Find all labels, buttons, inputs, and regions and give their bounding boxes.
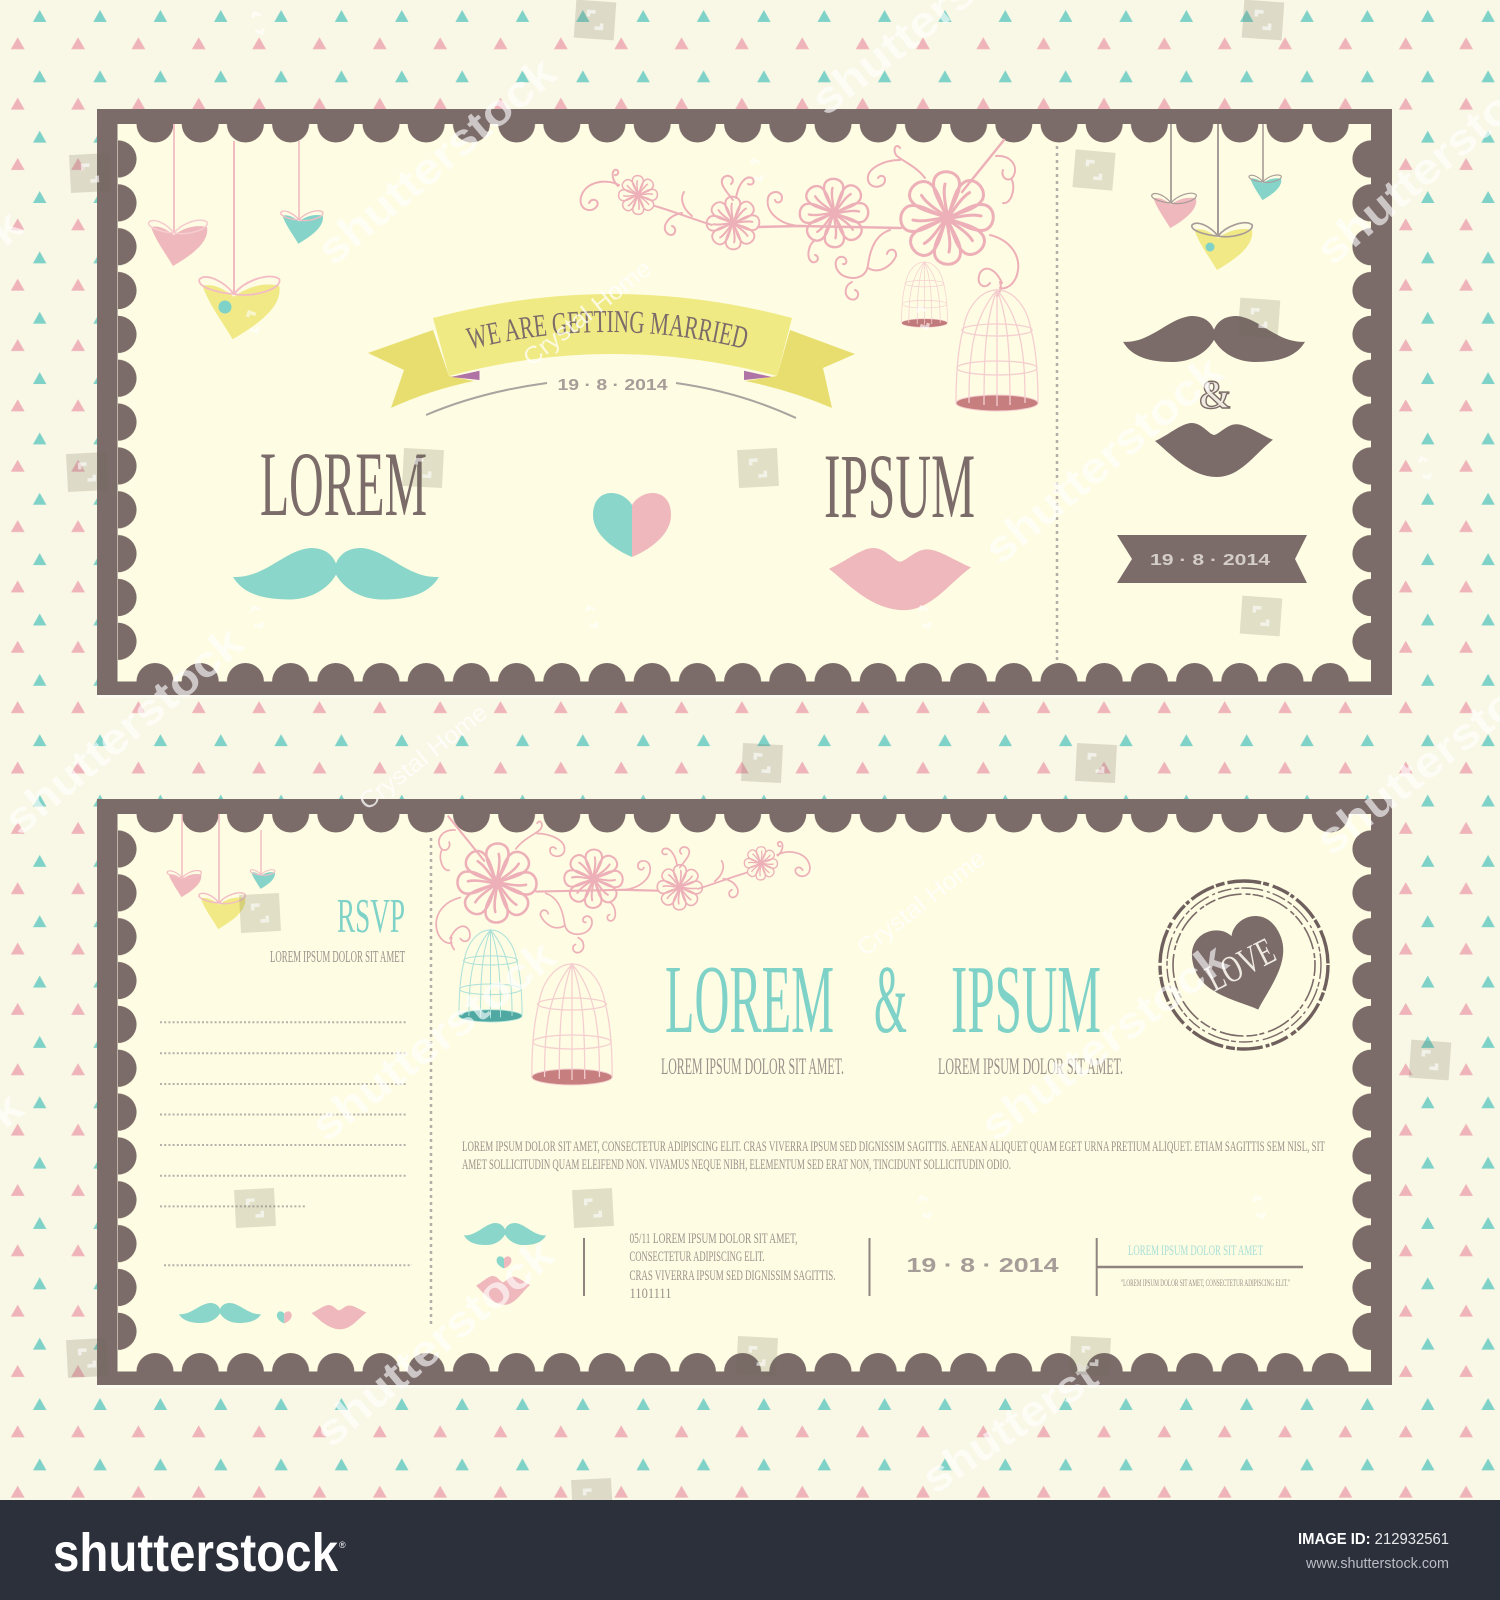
heading: LOREM: LOREM	[260, 433, 427, 535]
watermarks: shutterstock	[308, 47, 566, 275]
love stamp: LOVE	[1199, 930, 1282, 1000]
icon: small teal moustache	[464, 1223, 546, 1245]
watermarks: Crystal Home	[852, 845, 991, 962]
stub: date ribbon	[1117, 535, 1307, 583]
body paragraph	[462, 1139, 1325, 1173]
panel: front ticket	[97, 109, 1392, 698]
address block	[630, 1231, 836, 1302]
date with arcs	[426, 377, 796, 418]
shutterstock logo: shutterstock	[53, 1523, 339, 1583]
heading: LOREM & IPSUM: IPSUM	[951, 946, 1101, 1053]
stub: ampersand: &	[1198, 372, 1232, 417]
image id: IMAGE ID: 212932561	[1298, 1531, 1449, 1548]
stub: hanging pink heart	[1152, 124, 1196, 228]
watermarks: shutterstock	[972, 934, 1237, 1151]
stub: hanging teal heart	[1249, 124, 1281, 200]
teal caption: LOREM IPSUM DOLOR SIT AMET	[1128, 1243, 1263, 1259]
panel: back ticket	[97, 799, 1392, 1388]
stub: hanging yellow heart	[1192, 124, 1252, 270]
subtitles: LOREM IPSUM DOLOR SIT AMET.	[938, 1054, 1123, 1079]
address block: CONSECTETUR ADIPISCING ELIT.	[630, 1249, 764, 1265]
heading: LOREM & IPSUM: LOREM	[665, 946, 834, 1053]
stub: brown lips	[1155, 423, 1273, 477]
RSVP heading: RSVP	[337, 888, 405, 943]
banner text: WE ARE GETTING MARRIED	[465, 311, 748, 348]
icon: small pink lips	[476, 1276, 530, 1305]
date with arcs: 19 · 8 · 2014	[558, 377, 668, 394]
watermarks: shutterstock	[302, 930, 565, 1151]
icon: hanging yellow heart	[199, 141, 280, 339]
RSVP subtitle: LOREM IPSUM DOLOR SIT AMET	[270, 947, 405, 966]
date: 19 · 8 · 2014	[906, 1255, 1060, 1277]
watermarks: Crystal Home	[518, 255, 657, 372]
icon: hanging teal heart	[281, 141, 323, 244]
address block: 05/11 LOREM IPSUM DOLOR SIT AMET,	[630, 1231, 798, 1247]
small quote: "LOREM IPSUM DOLOR SIT AMET, CONSECTETUR ADIPISCING ELIT."	[1121, 1278, 1290, 1288]
watermarks: Crystal Home	[354, 699, 493, 816]
scalloped frame	[97, 109, 1392, 698]
footer bar	[0, 1500, 1500, 1600]
stub: brown moustache	[1123, 316, 1305, 362]
icon: two-tone heart	[593, 493, 671, 557]
floral branch	[581, 140, 1018, 300]
address block: 1101111	[630, 1286, 672, 1302]
watermarks: shutterstock	[0, 617, 253, 845]
banner ribbon	[368, 294, 855, 408]
watermarks: shutterstock	[306, 1229, 564, 1457]
watermarks: shutterstock	[975, 346, 1233, 574]
watermarks: shutterst	[913, 1351, 1107, 1503]
icon: large birdcage	[956, 290, 1038, 411]
registered mark: ®	[339, 1540, 346, 1550]
icon: teal moustache	[233, 548, 439, 600]
footer dividers	[584, 1238, 1303, 1296]
subtitles: LOREM IPSUM DOLOR SIT AMET.	[661, 1054, 844, 1079]
love stamp	[1160, 881, 1328, 1049]
RSVP dotted lines	[160, 1022, 412, 1265]
icon: small heart	[497, 1256, 511, 1269]
dotted tear line	[1056, 146, 1058, 660]
dotted tear line	[430, 838, 432, 1326]
icon: hanging pink heart	[149, 124, 207, 266]
website: www.shutterstock.com	[1305, 1555, 1449, 1572]
icon: pink lips	[829, 548, 971, 610]
icon: teal birdcage	[459, 930, 522, 1022]
address block: CRAS VIVERRA IPSUM SED DIGNISSIM SAGITTIS.	[630, 1268, 836, 1284]
icons: moustache heart lips row	[179, 1303, 366, 1329]
scalloped frame	[97, 799, 1392, 1388]
heading: LOREM & IPSUM: &	[874, 946, 907, 1053]
stub: date ribbon: 19 · 8 · 2014	[1150, 552, 1270, 569]
icon: hanging hearts	[167, 814, 275, 929]
icon: small birdcage	[902, 262, 947, 327]
icon: pink birdcage	[532, 964, 612, 1085]
body paragraph: AMET SOLLICITUDIN QUAM ELEIFEND NON. VIVAMUS NEQUE NIBH, ELEMENTUM SED ERAT NON, TINCIDUNT SOLLICITUDIN ODIO.	[462, 1157, 1011, 1173]
floral branch	[436, 816, 810, 953]
heading: IPSUM: IPSUM	[824, 435, 975, 537]
